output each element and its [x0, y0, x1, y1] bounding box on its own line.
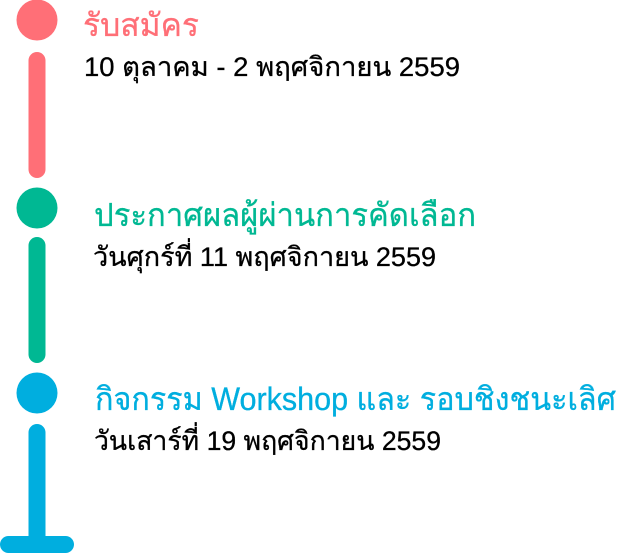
heading: workshop and final: กิจกรรม Workshop และ รอบชิงชนะเลิศ: [95, 381, 616, 417]
pink connector: [28, 52, 46, 178]
heading: selection results: ประกาศผลผู้ผ่านการคัดเลือก: [94, 197, 476, 235]
blue connector with base: [0, 424, 74, 553]
blue node: [16, 372, 58, 414]
date: workshop and final: วันเสาร์ที่ 19 พฤศจิกายน 2559: [94, 422, 441, 456]
heading: application: รับสมัคร: [83, 7, 199, 43]
pink node: [16, 0, 58, 40]
step 3: workshop and final: [0, 372, 616, 553]
date: selection results: วันศุกร์ที่ 11 พฤศจิกายน 2559: [93, 238, 436, 274]
date: application: 10 ตุลาคม - 2 พฤศจิกายน 2559: [84, 52, 460, 84]
step 2: selection results: [16, 188, 476, 363]
green connector: [28, 237, 46, 363]
green node: [16, 188, 58, 228]
step 1: application period: [16, 0, 460, 178]
